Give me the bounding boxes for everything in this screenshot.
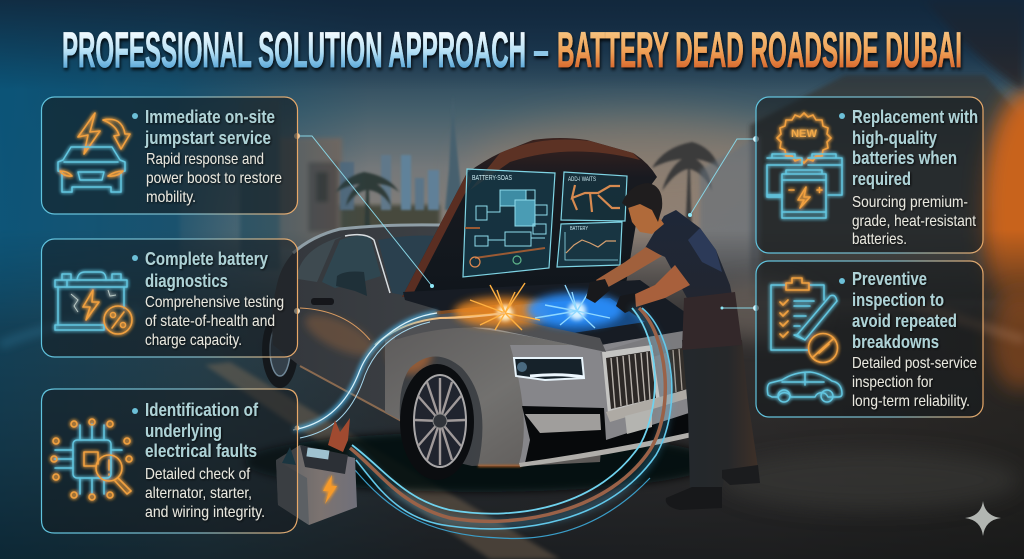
title: – [533, 22, 549, 78]
description: Comprehensive testing [145, 294, 284, 311]
description [146, 151, 282, 206]
description [145, 294, 284, 349]
boots [666, 487, 722, 510]
open hood [402, 138, 657, 297]
description [145, 466, 265, 521]
description: alternator, starter, [145, 485, 252, 502]
heading: required [852, 168, 911, 189]
heading: underlying [145, 420, 222, 441]
bullet [132, 113, 138, 119]
cables [293, 308, 672, 538]
left buildings [0, 60, 440, 300]
holographic panels [463, 169, 627, 277]
road [0, 230, 1024, 559]
heading: Identification of [145, 399, 259, 420]
jump pack [276, 445, 357, 525]
lower intake [522, 406, 692, 463]
holo chart panel 3: BATTERY [570, 226, 588, 232]
connector lines [294, 133, 759, 430]
right orange glow [982, 90, 1024, 330]
heading: breakdowns [852, 331, 939, 352]
front wheel [400, 364, 474, 480]
heading: diagnostics [145, 270, 228, 291]
description [852, 355, 977, 410]
heading: Replacement with [852, 106, 978, 127]
description: Detailed post-service [852, 355, 977, 372]
description: batteries. [852, 231, 907, 248]
description: power boost to restore [146, 170, 282, 187]
heading: Preventive [852, 268, 927, 289]
face [628, 203, 664, 234]
heading [145, 399, 259, 461]
panel: battery diagnostics [42, 239, 298, 357]
description: Rapid response and [146, 151, 264, 168]
description: long-term reliability. [852, 393, 970, 410]
bullet [132, 255, 138, 261]
front fascia [510, 325, 692, 464]
icon: battery with percent [55, 272, 132, 334]
heading [145, 248, 269, 291]
mechanic [586, 183, 760, 510]
title: PROFESSIONAL SOLUTION APPROACH [62, 22, 526, 78]
fender [385, 321, 604, 466]
description: and wiring integrity. [145, 504, 265, 521]
sparks [375, 283, 623, 345]
bullet [132, 408, 138, 414]
heading: high-quality [852, 127, 938, 148]
heading: jumpstart service [144, 127, 271, 148]
heading: inspection to [852, 289, 944, 310]
description: inspection for [852, 374, 934, 391]
heading: avoid repeated [852, 310, 957, 331]
grille [602, 345, 692, 434]
windows [293, 225, 440, 296]
palm trees [336, 142, 720, 241]
car shadow [245, 432, 715, 492]
torso [645, 210, 742, 350]
description: of state-of-health and [145, 313, 275, 330]
heading: batteries when [852, 147, 957, 168]
door handle [311, 298, 334, 305]
description: Sourcing premium- [852, 194, 968, 211]
holo wiring panel 2: ADD-I WAITS [568, 177, 596, 183]
car body [272, 225, 692, 466]
heading [852, 268, 957, 352]
icon: clipboard, pen, no sign and car [767, 278, 842, 402]
holo chart panel 3 [557, 222, 622, 267]
holo diagnostic panel 1: BATTERY-SOAS [472, 175, 512, 182]
hair [622, 183, 662, 222]
clamps [328, 418, 350, 452]
jump starter and cables [276, 308, 672, 538]
bullet [839, 113, 845, 119]
rear wheel [262, 312, 298, 388]
heading [852, 106, 978, 189]
skyline [340, 95, 463, 210]
description: mobility. [146, 189, 196, 206]
panel: battery replacement [756, 97, 983, 253]
holo wiring panel 2 [561, 172, 627, 221]
car [245, 138, 715, 492]
holo diagnostic panel 1 [463, 169, 555, 277]
gloves [586, 279, 610, 303]
arm far [596, 247, 662, 290]
description [852, 194, 976, 248]
heading: electrical faults [145, 440, 257, 461]
panel: preventive inspection [756, 261, 983, 417]
description: grade, heat-resistant [852, 213, 976, 230]
door reflections [300, 306, 432, 374]
headlight [514, 358, 584, 380]
description: charge capacity. [145, 332, 242, 349]
heading [144, 106, 275, 148]
heading: Immediate on-site [145, 106, 275, 127]
right houses [700, 75, 1024, 300]
icon: car with lightning and arrow [58, 113, 130, 192]
legs [682, 340, 758, 492]
engine bay [395, 280, 689, 352]
panel: immediate jumpstart [42, 97, 298, 214]
panel: electrical faults [42, 389, 298, 533]
arm near [631, 265, 690, 307]
icon: sparkle watermark [965, 501, 1001, 536]
icon: new batteries: NEW [791, 128, 818, 140]
bullet [839, 278, 845, 284]
icon: new batteries [767, 113, 842, 218]
description: Detailed check of [145, 466, 250, 483]
heading: Complete battery [145, 248, 269, 269]
side mirror [336, 272, 367, 296]
icon: circuit chip with magnifier [51, 419, 132, 500]
